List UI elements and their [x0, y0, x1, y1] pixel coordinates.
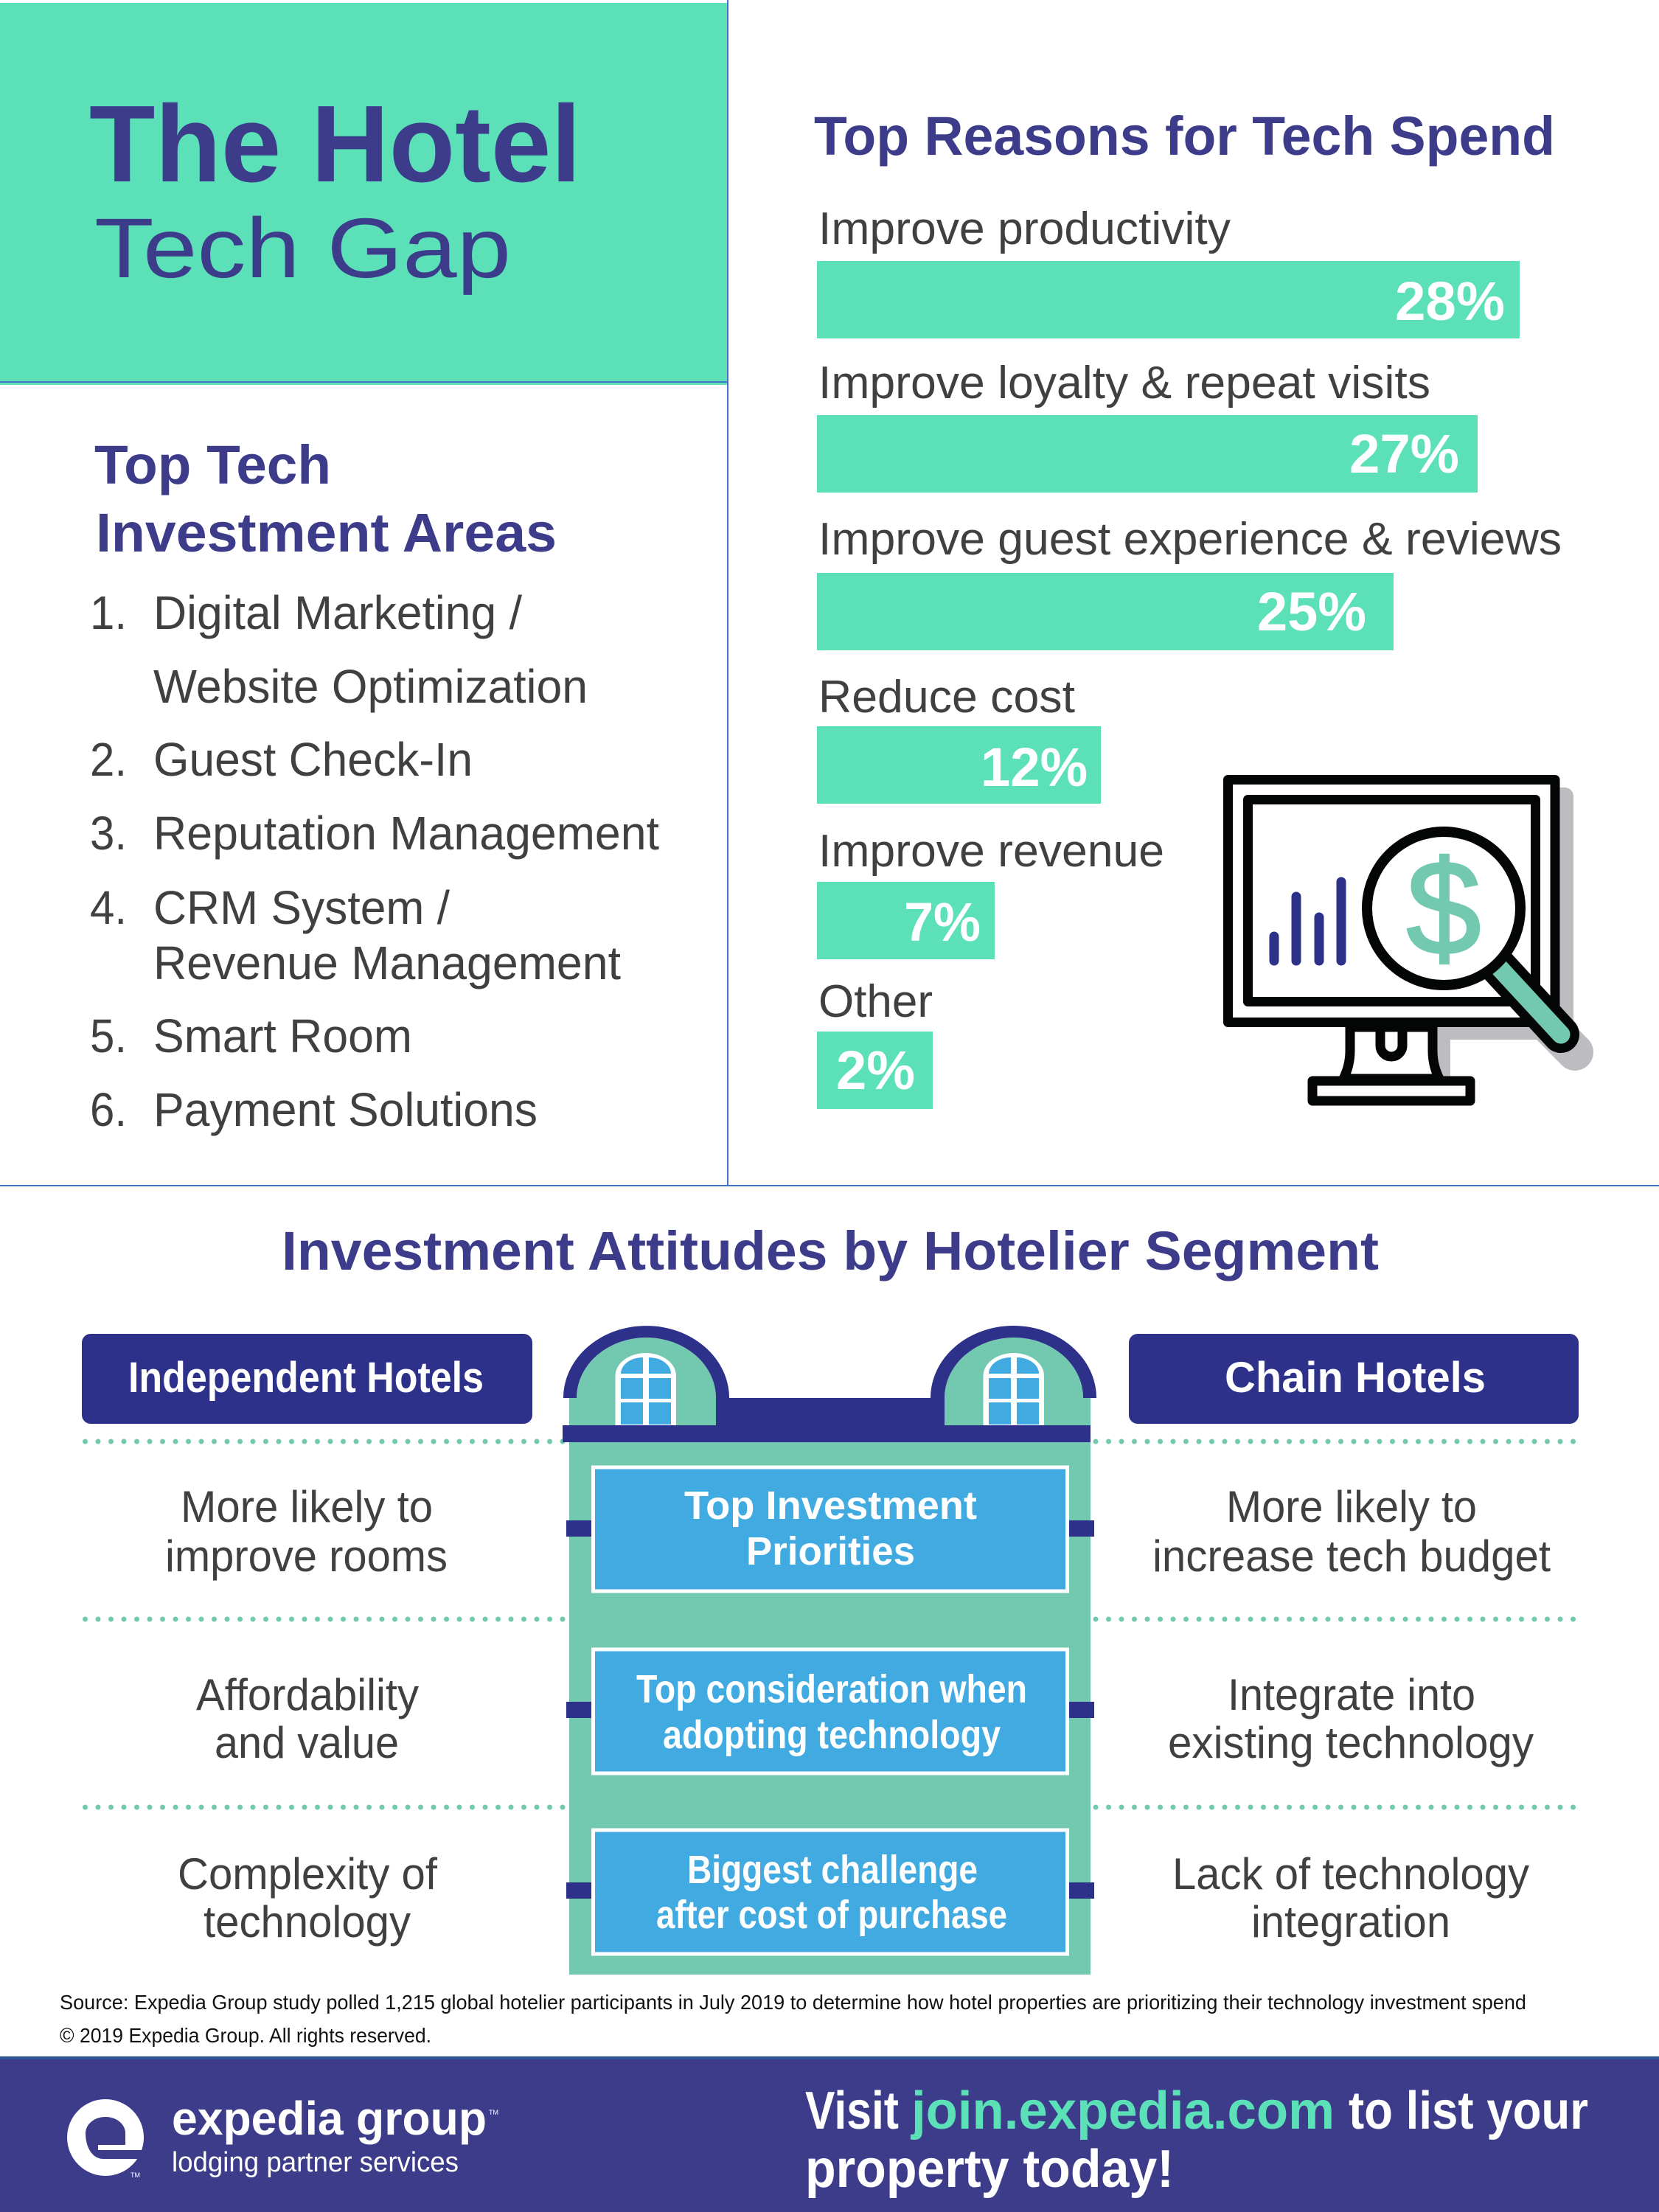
header: chain hotels: Chain Hotels: [1225, 1354, 1486, 1402]
bar chart: reasons: [817, 204, 1562, 1109]
answer: improve rooms: More likely to: [181, 1482, 433, 1531]
dotted row dividers: [86, 1441, 1579, 1807]
numbered list: CRM System /: [153, 881, 450, 934]
header: independent hotels: Independent Hotels: [128, 1354, 484, 1402]
numbered list: 2.: [90, 733, 127, 786]
answer: integrate into existing technology: [1168, 1670, 1534, 1767]
logo: expedia group: TM: [131, 2171, 140, 2179]
answer: affordability and value: and value: [215, 1718, 399, 1767]
sign: top investment priorities: [593, 1467, 1068, 1591]
call to action: join.expedia.com: [910, 2081, 1335, 2140]
heading: top tech investment areas: Investment Areas: [96, 502, 557, 563]
title: The Hotel: The Hotel: [89, 83, 581, 205]
logo: expedia group: [67, 2092, 498, 2179]
bar: other 2%: 2%: [836, 1040, 915, 1101]
numbered list: Website Optimization: [153, 660, 588, 713]
sign: top consideration when adopting technology: Top consideration when: [636, 1667, 1027, 1711]
answer: lack of technology integration: integration: [1251, 1897, 1450, 1947]
bar: reduce cost 12%: [817, 672, 1101, 804]
bar: improve revenue 7%: Improve revenue: [818, 826, 1164, 877]
heading: top reasons: Top Reasons for Tech Spend: [814, 105, 1555, 167]
numbered list: Smart Room: [153, 1009, 412, 1062]
numbered list: Digital Marketing /: [153, 586, 522, 639]
call to action: [805, 2081, 1588, 2199]
heading: top tech investment areas: [94, 434, 557, 563]
answer: integrate into existing technology: Integrate into: [1228, 1670, 1475, 1719]
numbered list: 4.: [90, 881, 127, 934]
bar: improve revenue 7%: [817, 826, 1164, 959]
footer band: [0, 2056, 1659, 2212]
bar: improve loyalty 27%: [817, 358, 1478, 493]
bar: improve loyalty 27%: Improve loyalty & repeat visits: [818, 358, 1430, 408]
bar: improve productivity 28%: [817, 204, 1520, 338]
bar: reduce cost 12%: 12%: [981, 737, 1088, 798]
bar: improve productivity 28%: Improve productivity: [818, 204, 1231, 254]
sign: biggest challenge after cost of purchase: after cost of purchase: [656, 1893, 1007, 1937]
illustration: hotel building: [563, 1326, 1096, 1975]
source note: © 2019 Expedia Group. All rights reserved.: [60, 2024, 431, 2047]
column: independent hotels answers: [165, 1482, 448, 1947]
answer: increase tech budget: More likely to: [1226, 1482, 1477, 1531]
left dome: [563, 1326, 729, 1425]
numbered list: Payment Solutions: [153, 1083, 538, 1136]
call to action: property today!: [805, 2140, 1174, 2199]
numbered list: [90, 586, 659, 1136]
heading: investment attitudes by hotelier segment: Investment Attitudes by Hotelier Segment: [282, 1220, 1379, 1281]
bar: improve productivity 28%: 28%: [1395, 271, 1505, 332]
answer: affordability and value: [196, 1670, 419, 1767]
numbered list: 6.: [90, 1083, 127, 1136]
header: chain hotels: [1129, 1334, 1579, 1424]
panel: top tech investment areas: [90, 434, 659, 1136]
answer: improve rooms: [165, 1482, 448, 1581]
numbered list: Reputation Management: [153, 807, 659, 860]
numbered list: 1.: [90, 586, 127, 639]
bar: improve guest experience 25%: [817, 514, 1562, 650]
bar: reduce cost 12%: Reduce cost: [818, 672, 1075, 723]
icon: monitor with magnifying glass: [1228, 780, 1575, 1101]
right dome: [931, 1326, 1096, 1425]
answer: complexity of technology: Complexity of: [178, 1849, 437, 1899]
sign: biggest challenge after cost of purchase: [593, 1830, 1068, 1954]
answer: increase tech budget: [1152, 1482, 1551, 1581]
answer: integrate into existing technology: existing technology: [1168, 1718, 1534, 1767]
bar: improve loyalty 27%: 27%: [1349, 423, 1459, 484]
source note: Source: Expedia Group study polled 1,215 global hotelier participants in July 2019 to determine how hotel properties are prioritizing their technology investment spend: [60, 1991, 1526, 2014]
column: chain hotels answers: [1152, 1482, 1551, 1947]
logo: expedia group: expedia group: [172, 2092, 487, 2145]
answer: increase tech budget: increase tech budget: [1152, 1531, 1551, 1581]
logo: expedia group: TM: [489, 2109, 498, 2116]
call to action: Visit: [805, 2081, 899, 2140]
numbered list: 3.: [90, 807, 127, 860]
logo: expedia group: lodging partner services: [172, 2147, 459, 2178]
call to action: to list your: [1349, 2081, 1588, 2140]
answer: complexity of technology: technology: [204, 1897, 411, 1947]
sign: top investment priorities: Priorities: [746, 1529, 915, 1573]
bar: other 2%: Other: [818, 976, 933, 1027]
answer: complexity of technology: [178, 1849, 437, 1947]
answer: improve rooms: improve rooms: [165, 1531, 448, 1581]
panel: top reasons for tech spend: [814, 105, 1575, 1109]
numbered list: 5.: [90, 1009, 127, 1062]
heading: top tech investment areas: Top Tech: [94, 434, 331, 495]
source note: [60, 1991, 1526, 2047]
bar: other 2%: [817, 976, 933, 1109]
numbered list: Revenue Management: [153, 936, 621, 990]
sign: biggest challenge after cost of purchase: Biggest challenge: [687, 1848, 978, 1892]
header: independent hotels: [82, 1334, 532, 1424]
subtitle: Tech Gap: Tech Gap: [94, 201, 511, 296]
numbered list: Guest Check-In: [153, 733, 473, 786]
answer: lack of technology integration: [1172, 1849, 1529, 1947]
sign: top consideration when adopting technology: [593, 1649, 1068, 1773]
sign: top consideration when adopting technology: adopting technology: [663, 1713, 1001, 1757]
answer: affordability and value: Affordability: [196, 1670, 419, 1719]
bar: improve revenue 7%: 7%: [904, 891, 981, 953]
bar: improve guest experience 25%: 25%: [1257, 581, 1366, 642]
icon: monitor with magnifying glass: $: [1406, 832, 1481, 983]
panel: title banner: [0, 3, 728, 385]
bar: improve guest experience 25%: Improve guest experience & reviews: [818, 514, 1562, 565]
answer: lack of technology integration: Lack of technology: [1172, 1849, 1529, 1899]
sign: top investment priorities: Top Investment: [684, 1484, 977, 1528]
